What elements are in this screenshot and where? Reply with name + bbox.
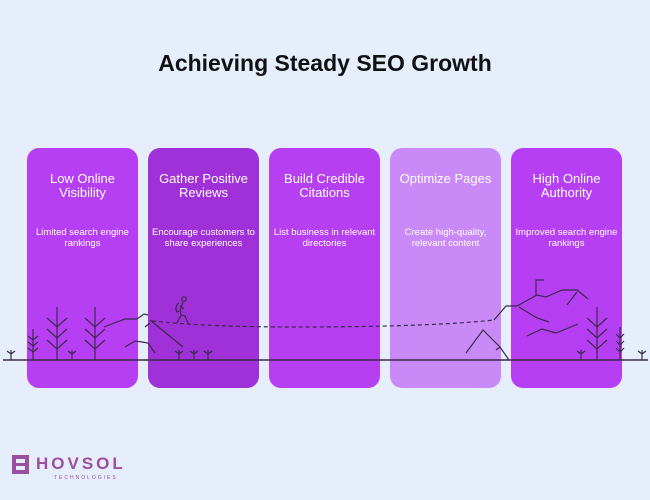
logo: TECHNOLOGIES bbox=[54, 475, 118, 481]
card: low online visibility: Low Online bbox=[50, 171, 115, 186]
card: build credible citations: Citations bbox=[299, 185, 350, 200]
card: optimize pages: Optimize Pages bbox=[400, 171, 491, 186]
card: optimize pages: Create high-quality, relevant content bbox=[405, 227, 486, 249]
card: gather positive reviews: Encourage customers to share experiences bbox=[152, 227, 255, 249]
card: gather positive reviews bbox=[148, 148, 259, 388]
icon: logo mark bbox=[12, 455, 29, 474]
card: high online authority bbox=[511, 148, 622, 388]
card: high online authority: High Online bbox=[533, 171, 600, 186]
card: gather positive reviews: Reviews bbox=[179, 185, 228, 200]
card: optimize pages bbox=[390, 148, 501, 388]
card: high online authority: Authority bbox=[541, 185, 592, 200]
logo bbox=[12, 454, 126, 481]
card: build credible citations: List business in relevant directories bbox=[274, 227, 375, 249]
card: low online visibility bbox=[27, 148, 138, 388]
card: low online visibility: Limited search engine rankings bbox=[36, 227, 129, 249]
title: Achieving Steady SEO Growth bbox=[158, 50, 492, 76]
card: gather positive reviews: Gather Positive bbox=[159, 171, 248, 186]
card: build credible citations: Build Credible bbox=[284, 171, 365, 186]
brand name: HOVSOL bbox=[36, 454, 126, 473]
card: high online authority: Improved search engine rankings bbox=[516, 227, 617, 249]
card: low online visibility: Visibility bbox=[59, 185, 106, 200]
card: build credible citations bbox=[269, 148, 380, 388]
